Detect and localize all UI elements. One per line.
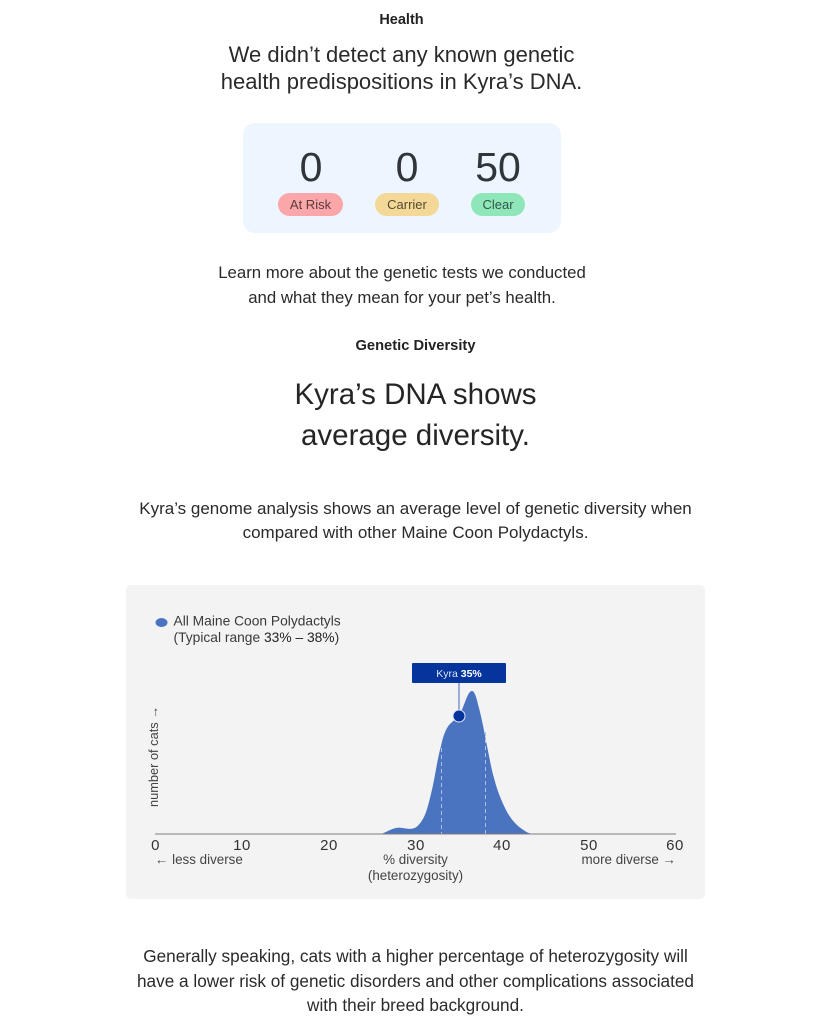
x axis tick labels: 50 [580, 837, 598, 854]
x axis tick labels [151, 837, 684, 854]
x axis [155, 833, 676, 835]
legend [156, 614, 341, 645]
heading: Genetic Diversity: Genetic Diversity [355, 338, 476, 354]
text block: heterozygosity note: Generally speaking, cats with a higher percentage of heterozygosity will [143, 946, 688, 966]
x axis tick labels: 60 [666, 837, 684, 854]
text block: learn more: and what they mean for your pet’s health. [248, 288, 556, 307]
badge: at risk: At Risk [290, 197, 331, 212]
text block: health summary: health predispositions in Kyra’s DNA. [221, 69, 582, 94]
x axis tick labels: 40 [493, 837, 511, 854]
text block: genome analysis: compared with other Maine Coon Polydactyls. [243, 522, 588, 542]
x axis tick labels: 0 [151, 837, 160, 854]
title: average diversity [294, 378, 537, 452]
text block: health summary: We didn’t detect any known genetic [229, 42, 574, 67]
at risk count: 0 [300, 144, 322, 190]
text block: genome analysis: Kyra’s genome analysis shows an average level of genetic diversity when [139, 498, 692, 518]
carrier count: 0 [396, 144, 418, 190]
legend: All Maine Coon Polydactyls [174, 614, 341, 628]
distribution curve [381, 691, 535, 834]
typical range markers [442, 732, 486, 834]
x axis captions: (heterozygosity) [368, 868, 463, 883]
badge: at risk [278, 193, 343, 216]
text block: heterozygosity note: with their breed background. [307, 995, 524, 1015]
badge: carrier [375, 193, 439, 216]
y axis label: number of cats → [146, 706, 161, 807]
text block: heterozygosity note: have a lower risk of genetic disorders and other complications associated [137, 970, 694, 990]
x axis tick labels: 20 [320, 837, 338, 854]
panel: health results [243, 123, 561, 233]
title: average diversity: Kyra’s DNA shows [294, 378, 537, 411]
x axis tick labels: 10 [233, 837, 251, 854]
heading: Health: Health [379, 12, 424, 28]
x axis tick labels: 30 [407, 837, 425, 854]
x axis captions: ← less diverse [155, 852, 243, 867]
badge: clear: Clear [482, 197, 514, 212]
clear count: 50 [475, 144, 521, 190]
marker: Kyra 35%: Kyra 35% [436, 668, 482, 680]
text block: heterozygosity note [137, 946, 694, 1015]
title: average diversity: average diversity. [301, 419, 530, 452]
x axis captions: % diversity [383, 852, 448, 867]
text block: learn more: Learn more about the genetic tests we conducted [218, 263, 586, 282]
badge: clear [471, 193, 525, 216]
legend: (Typical range 33% – 38%) [174, 630, 339, 645]
text block: health summary [221, 42, 582, 94]
badge: carrier: Carrier [387, 197, 427, 212]
x axis captions: more diverse → [581, 852, 676, 867]
marker: Kyra 35% [412, 663, 506, 722]
panel: diversity chart [126, 585, 705, 899]
text block: genome analysis [139, 498, 692, 542]
x axis captions [155, 852, 676, 883]
text block: learn more [218, 263, 586, 307]
